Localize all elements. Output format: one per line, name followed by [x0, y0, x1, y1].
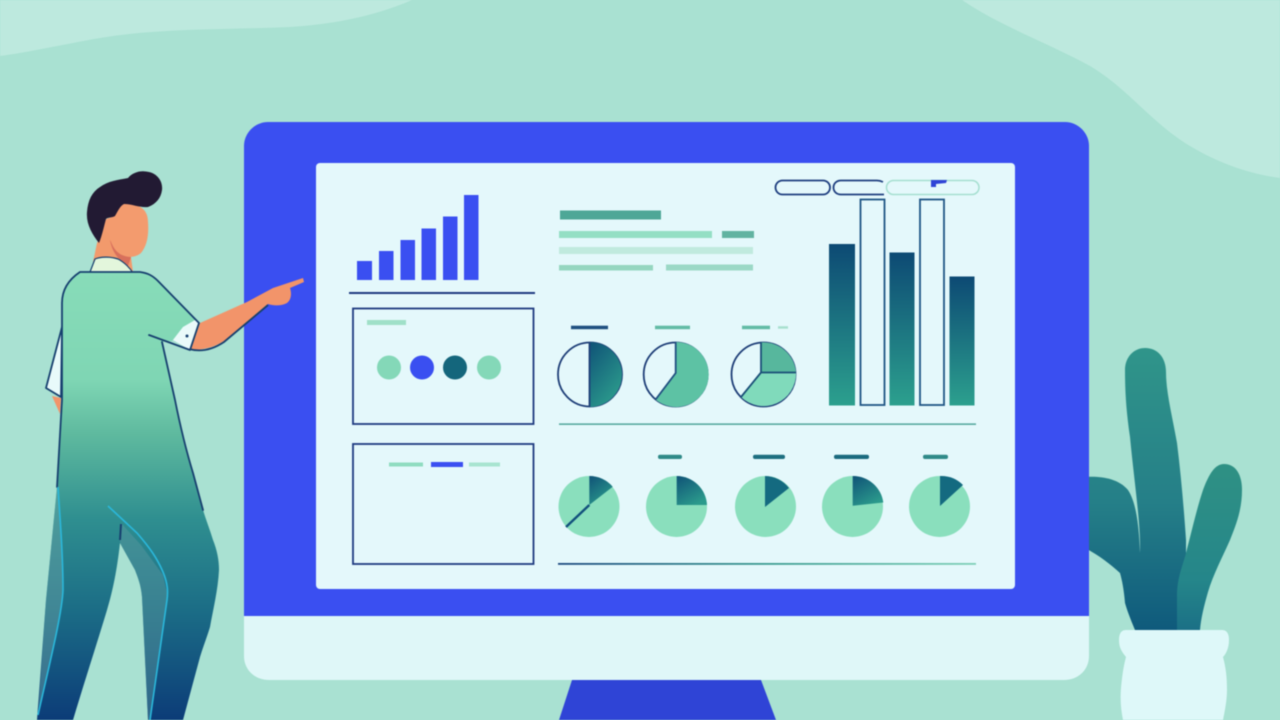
pill buttons	[776, 180, 979, 194]
plant: pot	[1119, 630, 1229, 720]
person: undershirt sleeve	[46, 327, 62, 397]
person: forearm pointing	[190, 278, 304, 350]
bottom pie 3	[735, 455, 796, 537]
legend dots	[377, 356, 501, 380]
bottom pie 1	[558, 476, 620, 537]
person: body outline	[57, 272, 203, 510]
plant: right leaf	[1177, 464, 1242, 630]
legend heading bar	[367, 320, 406, 325]
person: hair	[87, 171, 162, 243]
bottom pie 2	[646, 455, 707, 537]
person	[37, 171, 304, 720]
panel: legend dots box	[353, 308, 534, 424]
pie chart: three slices	[732, 326, 796, 406]
blue growth bar chart	[357, 195, 478, 280]
bottom pie 4	[822, 455, 883, 537]
monitor	[244, 122, 1089, 720]
pie chart: half	[558, 326, 622, 407]
person: outer leg shading	[38, 487, 63, 715]
monitor: stand	[559, 680, 776, 720]
person: leg crease lines	[38, 487, 168, 720]
bottom pie 5	[909, 455, 970, 537]
monitor: screen	[316, 163, 1015, 589]
panel: empty chart box	[353, 444, 534, 564]
divider rule lower	[558, 563, 976, 565]
divider rule upper	[559, 423, 976, 425]
person: neck shadow	[110, 240, 131, 266]
background blob: top left	[0, 0, 412, 56]
monitor: blue bezel	[244, 122, 1089, 616]
person: neck and ear	[93, 220, 133, 272]
text block placeholder lines	[559, 210, 754, 270]
person: face	[104, 204, 148, 257]
monitor: chin	[244, 600, 1089, 680]
person: shirt cuff	[173, 320, 199, 350]
person: inner leg shading	[120, 523, 168, 720]
box heading bars	[389, 462, 500, 467]
pie chart: two slices	[644, 326, 709, 407]
column chart	[829, 200, 974, 406]
pie row: bottom	[558, 455, 970, 537]
plant	[1085, 348, 1242, 720]
background blob: top right	[962, 0, 1280, 178]
person: body and trousers	[37, 272, 219, 720]
person: back hand	[52, 396, 61, 414]
person: collar	[90, 257, 133, 273]
person: forearm outline	[189, 305, 268, 350]
plant: stem and left leaf	[1085, 348, 1186, 630]
